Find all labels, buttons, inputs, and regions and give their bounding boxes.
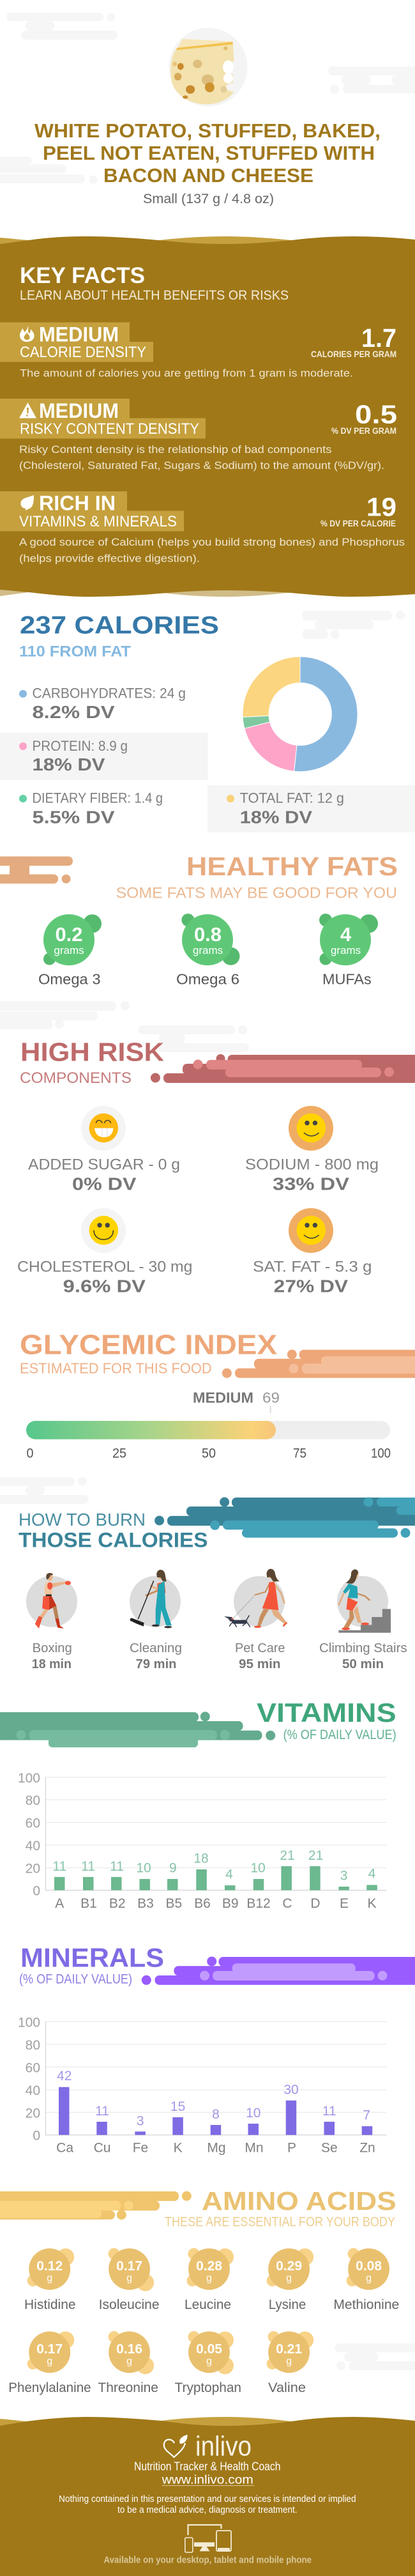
label: cleaning: 79 min [136, 1657, 176, 1671]
fact: risky content density: MEDIUM [39, 399, 119, 422]
chart: minerals bar chart: Mn [245, 2140, 264, 2155]
fact: rich in vitamins and minerals: (helps provide effective digestion). [19, 552, 200, 565]
amino: valine: Valine [268, 2380, 306, 2395]
label: climbing stairs [319, 1641, 407, 1671]
metric: omega 6: grams [193, 944, 223, 956]
metric: omega 3: grams [54, 944, 84, 956]
amino: isoleucine: Isoleucine [99, 2297, 160, 2312]
subheading: healthy fats: SOME FATS MAY BE GOOD FOR YOU [116, 884, 397, 902]
gauge: glycemic index: 100 [371, 1446, 391, 1460]
icon: flame [20, 326, 34, 342]
fact: calorie density [0, 322, 396, 379]
legend: protein [0, 733, 208, 780]
chart: minerals bar chart: 15 [170, 2099, 185, 2114]
chart: vitamins bar chart: 21 [308, 1848, 323, 1863]
chart: vitamins bar chart: 80 [26, 1793, 40, 1808]
chart: minerals bar chart: 30 [283, 2082, 299, 2097]
chart: minerals bar chart: 11 [322, 2104, 336, 2119]
chart: vitamins bar chart: D [310, 1896, 321, 1911]
legend: protein: PROTEIN: 8.9 g [32, 738, 128, 754]
amino: isoleucine: g [126, 2273, 132, 2284]
chart: vitamins bar chart: B3 [137, 1896, 154, 1911]
chart: vitamins bar chart: 100 [18, 1771, 40, 1786]
legend: total fat: TOTAL FAT: 12 g [240, 790, 344, 806]
fact: rich in vitamins and minerals: % DV PER CALORIE [321, 519, 396, 528]
legend: total fat: 18% DV [240, 807, 312, 827]
heading: key facts: KEY FACTS [20, 263, 145, 288]
chart: minerals bar chart: P [287, 2140, 296, 2155]
amino: histidine: Histidine [24, 2297, 76, 2312]
gauge: glycemic index: 69 [262, 1389, 280, 1406]
amino: threonine: 0.16 [116, 2342, 142, 2356]
decoration: healthy fats cloud [0, 856, 73, 884]
icon: big smile face [89, 1216, 118, 1245]
logo: inlivo [164, 2430, 252, 2462]
heading: high risk: HIGH RISK [20, 1038, 164, 1067]
chart: vitamins bar chart: B2 [109, 1896, 126, 1911]
chart: minerals bar chart: 10 [246, 2106, 260, 2120]
risk item: saturated fat: SAT. FAT - 5.3 g [253, 1259, 372, 1275]
heading: calories: 237 CALORIES [20, 612, 219, 639]
amino: isoleucine: 0.17 [116, 2258, 142, 2273]
panel: key facts [0, 236, 415, 597]
chart: vitamins bar chart: 20 [26, 1862, 40, 1876]
chart: vitamins bar chart: 4 [225, 1867, 233, 1882]
label: pet care: Pet Care [235, 1641, 285, 1655]
amino: histidine: g [47, 2273, 52, 2284]
icon: leaf [20, 495, 34, 510]
risk item: cholesterol: CHOLESTEROL - 30 mg [17, 1259, 192, 1275]
subheading: glycemic index: ESTIMATED FOR THIS FOOD [20, 1360, 212, 1376]
heading: minerals: MINERALS [20, 1942, 164, 1972]
chart: vitamins bar chart: B5 [166, 1896, 182, 1911]
chart: vitamins bar chart: 40 [26, 1839, 40, 1853]
gauge: glycemic index: MEDIUM [193, 1389, 253, 1406]
icon: smiling face [297, 1114, 326, 1142]
illustration: exercise circles and figures [26, 1569, 391, 1633]
legend: dietary fiber: 5.5% DV [32, 807, 115, 827]
legend: carbohydrates [19, 685, 186, 722]
chart: vitamins bar chart: B9 [222, 1896, 239, 1911]
fact: rich in vitamins and minerals: RICH IN [39, 492, 116, 515]
chart: minerals bar chart: 7 [363, 2108, 370, 2123]
metric: omega 3: 0.2 [55, 923, 83, 946]
amino: threonine: Threonine [98, 2380, 158, 2395]
legend: carbohydrates: CARBOHYDRATES: 24 g [32, 685, 186, 702]
chart: vitamins bar chart: 21 [280, 1848, 295, 1863]
icon: devices [185, 2525, 231, 2552]
decoration: high risk cloud [151, 1054, 415, 1083]
risk item: cholesterol [17, 1208, 192, 1296]
title: BACON AND CHEESE [103, 164, 313, 187]
chart: vitamins bar chart: 18 [193, 1851, 209, 1866]
gauge: glycemic index [26, 1389, 391, 1460]
legend: dietary fiber: DIETARY FIBER: 1.4 g [32, 790, 163, 806]
chart: minerals bar chart: 42 [57, 2069, 72, 2083]
chart: vitamins bar chart: C [282, 1896, 292, 1911]
title: WHITE POTATO, STUFFED, BAKED, [34, 119, 381, 142]
subheading: minerals: (% OF DAILY VALUE) [19, 1972, 132, 1986]
subheading: calories from fat: 110 FROM FAT [19, 643, 131, 661]
amino: tryptophan: g [206, 2356, 212, 2367]
amino: methionine [333, 2248, 399, 2312]
website link: www.inlivo.com [162, 2473, 253, 2487]
amino: phenylalanine: Phenylalanine [8, 2380, 91, 2395]
figure: woman climbing stairs [338, 1569, 391, 1633]
amino: tryptophan: 0.05 [196, 2342, 222, 2356]
heading: how to burn those calories: HOW TO BURN [19, 1510, 146, 1529]
decoration: vitamins cloud [0, 1712, 275, 1747]
amino: leucine: g [206, 2273, 212, 2284]
chart: vitamins bar chart [18, 1771, 386, 1911]
chart: vitamins bar chart: 10 [250, 1861, 266, 1876]
amino: leucine: 0.28 [196, 2258, 222, 2273]
legend: protein: 18% DV [32, 755, 105, 774]
amino: methionine: 0.08 [356, 2258, 382, 2273]
title [34, 119, 381, 187]
amino: phenylalanine [8, 2331, 91, 2395]
chart: minerals bar chart: 40 [26, 2083, 40, 2098]
amino: tryptophan [175, 2331, 241, 2395]
risk item: cholesterol: 9.6% DV [63, 1276, 146, 1296]
chart: minerals bar chart: K [174, 2140, 183, 2155]
subheading: LEARN ABOUT HEALTH BENEFITS OR RISKS [20, 288, 289, 303]
risk item: added sugar: ADDED SUGAR - 0 g [28, 1156, 180, 1173]
legend: carbohydrates: 8.2% DV [32, 702, 115, 722]
disclaimer [59, 2494, 356, 2515]
amino: tryptophan: Tryptophan [175, 2380, 241, 2395]
risk item: added sugar: 0% DV [72, 1174, 137, 1193]
chart: vitamins bar chart: 9 [169, 1861, 177, 1876]
chart: minerals bar chart: 11 [95, 2104, 109, 2119]
fact: rich in vitamins and minerals [0, 491, 405, 565]
fact: rich in vitamins and minerals: A good source of Calcium (helps you build strong bones) and Phosphorus [19, 536, 405, 548]
icon: grinning face [89, 1114, 118, 1142]
subheading: vitamins: (% OF DAILY VALUE) [283, 1728, 396, 1742]
chart: minerals bar chart [18, 2015, 386, 2155]
chart: vitamins bar chart: 60 [26, 1816, 40, 1831]
decoration: glycemic cloud [222, 1349, 415, 1378]
amino: threonine: g [126, 2356, 132, 2367]
amino: leucine [185, 2248, 234, 2312]
heading: how to burn those calories: THOSE CALORIES [19, 1528, 208, 1551]
heading: vitamins: VITAMINS [257, 1698, 396, 1728]
label: climbing stairs: 50 min [342, 1657, 384, 1671]
risk item: sodium: SODIUM - 800 mg [245, 1156, 379, 1173]
amino: methionine: Methionine [333, 2297, 399, 2312]
chart: minerals bar chart: 80 [26, 2038, 40, 2053]
metric: MUFAs: MUFAs [322, 971, 372, 988]
label: boxing [32, 1641, 72, 1671]
availability note: Available on your desktop, tablet and mobile phone [103, 2555, 312, 2566]
risk item: sodium [245, 1106, 379, 1193]
fact: risky content density: Risky Content density is the relationship of bad components [19, 443, 332, 456]
metric: MUFAs: grams [331, 944, 361, 956]
chart: minerals bar chart: 20 [26, 2106, 40, 2120]
fact: risky content density: RISKY CONTENT DENSITY [20, 420, 199, 438]
chart: vitamins bar chart: A [55, 1896, 64, 1911]
risk item: saturated fat: 27% DV [274, 1276, 348, 1296]
fact: risky content density [0, 399, 397, 471]
chart: vitamins bar chart: 3 [340, 1868, 347, 1883]
heading: healthy fats: HEALTHY FATS [186, 852, 398, 881]
chart: minerals bar chart: Cu [94, 2140, 110, 2155]
fact: risky content density: % DV PER GRAM [331, 426, 396, 436]
gauge: glycemic index: 75 [293, 1446, 306, 1460]
amino: lysine: g [286, 2273, 292, 2284]
label: pet care [235, 1641, 285, 1671]
amino: histidine [24, 2248, 76, 2312]
chart: vitamins bar chart: 11 [52, 1859, 66, 1874]
metric: omega 6 [176, 914, 240, 988]
chart: vitamins bar chart: 0 [33, 1884, 40, 1899]
chart: minerals bar chart: Se [321, 2140, 338, 2155]
metric: omega 3 [38, 914, 102, 988]
icon: smiling face [297, 1216, 326, 1245]
chart: vitamins bar chart: B12 [246, 1896, 271, 1911]
amino: methionine: g [366, 2273, 372, 2284]
chart: minerals bar chart: Mg [207, 2140, 226, 2155]
label: climbing stairs: Climbing Stairs [319, 1641, 407, 1655]
fact: risky content density: (Cholesterol, Saturated Fat, Sugars & Sodium) to the amount (%DV/gr). [19, 459, 384, 471]
chart: vitamins bar chart: B6 [194, 1896, 211, 1911]
heading: glycemic index: GLYCEMIC INDEX [20, 1329, 277, 1360]
fact: calorie density: 1.7 [361, 323, 396, 353]
figure: cleaner [130, 1570, 172, 1628]
metric: MUFAs: 4 [340, 923, 352, 946]
panel: footer [0, 2417, 415, 2576]
chart: minerals bar chart: 0 [33, 2129, 40, 2143]
amino: lysine: Lysine [269, 2297, 306, 2312]
label: cleaning [130, 1641, 182, 1671]
gauge: glycemic index: 50 [202, 1446, 216, 1460]
heading: amino acids: AMINO ACIDS [202, 2186, 396, 2216]
chart: minerals bar chart: 8 [212, 2107, 220, 2122]
legend: total fat [207, 785, 415, 832]
label: boxing: Boxing [33, 1641, 72, 1655]
gauge: glycemic index: 0 [27, 1446, 33, 1460]
fact: calorie density: CALORIE DENSITY [20, 344, 146, 361]
gauge: glycemic index: 25 [112, 1446, 126, 1460]
chart: vitamins bar chart: 11 [81, 1859, 95, 1874]
chart: vitamins bar chart: 11 [110, 1859, 124, 1874]
chart: vitamins bar chart: E [340, 1896, 349, 1911]
chart: minerals bar chart: Ca [56, 2140, 73, 2155]
fact: rich in vitamins and minerals: VITAMINS & MINERALS [19, 513, 177, 530]
title: PEEL NOT EATEN, STUFFED WITH [43, 142, 375, 164]
amino: valine [267, 2331, 313, 2395]
logo: inlivo: inlivo [195, 2430, 252, 2462]
serving size: Small (137 g / 4.8 oz) [143, 192, 274, 206]
amino: threonine [98, 2331, 158, 2395]
subheading: components: COMPONENTS [20, 1070, 132, 1087]
metric: omega 6: 0.8 [194, 923, 222, 946]
decoration: minerals cloud [142, 1956, 415, 1985]
icon: cheese photo [169, 28, 248, 106]
amino: valine: 0.21 [276, 2342, 302, 2356]
risk item: added sugar [28, 1106, 180, 1193]
risk item: sodium: 33% DV [273, 1174, 349, 1193]
chart: vitamins bar chart: K [367, 1896, 377, 1911]
amino: isoleucine [99, 2248, 160, 2312]
figure: woman walking dog [224, 1569, 288, 1628]
chart: macronutrient donut [243, 657, 358, 772]
fact: rich in vitamins and minerals: 19 [366, 492, 396, 521]
amino: lysine [267, 2248, 313, 2312]
decoration: amino acids cloud [0, 2191, 192, 2220]
risk item: saturated fat [253, 1208, 372, 1296]
chart: minerals bar chart: 3 [137, 2114, 144, 2129]
legend: dietary fiber [19, 790, 163, 827]
tagline: Nutrition Tracker & Health Coach [134, 2460, 281, 2473]
chart: minerals bar chart: 60 [26, 2060, 40, 2075]
fact: calorie density: The amount of calories you are getting from 1 gram is moderate. [20, 367, 353, 379]
metric: MUFAs [319, 914, 378, 988]
disclaimer: to be a medical advice, diagnosis or treatment. [117, 2504, 298, 2515]
heading: how to burn those calories [19, 1510, 208, 1551]
label: cleaning: Cleaning [130, 1641, 182, 1655]
amino: phenylalanine: g [47, 2356, 52, 2367]
icon: warning triangle [19, 402, 36, 418]
chart: minerals bar chart: Zn [359, 2140, 375, 2155]
chart: vitamins bar chart: 4 [368, 1867, 376, 1882]
fact: risky content density: 0.5 [355, 400, 397, 429]
fact: calorie density: MEDIUM [39, 323, 119, 346]
label: boxing: 18 min [32, 1657, 72, 1671]
amino: phenylalanine: 0.17 [36, 2342, 63, 2356]
chart: vitamins bar chart: 10 [136, 1861, 151, 1876]
decoration: burn calories cloud [155, 1498, 415, 1538]
metric: omega 3: Omega 3 [38, 971, 101, 988]
disclaimer: Nothing contained in this presentation and our services is intended or implied [59, 2494, 356, 2504]
amino: lysine: 0.29 [276, 2258, 302, 2273]
label: pet care: 95 min [239, 1657, 281, 1671]
metric: omega 6: Omega 6 [176, 971, 239, 988]
chart: minerals bar chart: Fe [133, 2140, 148, 2155]
amino: histidine: 0.12 [36, 2258, 63, 2273]
amino: leucine: Leucine [185, 2297, 231, 2312]
chart: vitamins bar chart: B1 [80, 1896, 97, 1911]
fact: calorie density: CALORIES PER GRAM [311, 349, 396, 359]
amino: valine: g [286, 2356, 292, 2367]
figure: boxer [35, 1573, 71, 1629]
chart: minerals bar chart: 100 [18, 2015, 40, 2030]
